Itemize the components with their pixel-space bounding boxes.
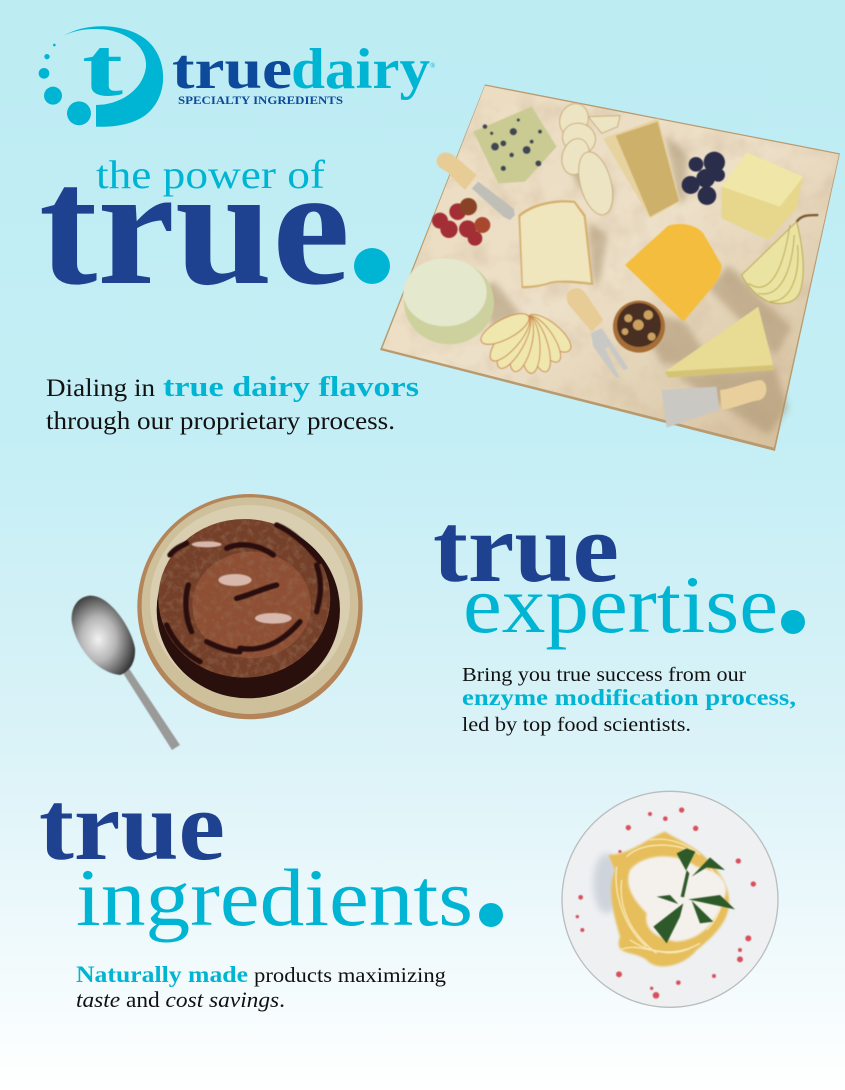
spoon [72,596,180,750]
round bloomy cheese [403,258,494,344]
line three: led by top food scientists. [462,714,691,736]
large pale wedge [518,200,593,288]
bread slices [555,100,620,219]
line one highlight: Naturally made [76,962,248,987]
line one lead: Dialing in [46,375,156,402]
logo: True Dairy [39,21,436,127]
photo: pasta plate [561,791,779,1008]
heading word: true: true [39,772,225,881]
red grapes [432,198,490,246]
plate [561,791,779,1008]
text block: dialing in true dairy flavors [46,371,419,435]
photo: chocolate ice cream bowl and spoon [72,494,363,750]
logo registered mark: ® [430,62,436,70]
heading period dot [781,610,805,634]
line one: Bring you true success from our [462,664,746,686]
marble board [380,84,840,451]
heading word: ingredients: ingredients [76,852,473,943]
pasta nest [608,832,729,966]
dark grapes [682,152,725,205]
triangular cheese wedge [665,307,774,378]
line one remainder: products maximizing [254,963,447,987]
spreader knife [437,153,515,220]
line two: taste and cost savings . [76,987,285,1012]
photo: cheese board [380,84,840,451]
blue cheese [473,107,557,183]
apple slices [477,308,576,375]
logo icon: crescent and bubbles [39,26,163,127]
pear slices [742,215,818,303]
logo tagline: SPECIALTY INGREDIENTS [178,93,343,107]
line two highlight: enzyme modification process, [462,685,796,710]
text block: ingredients description [76,962,447,1012]
logo wordmark dairy: dairy [291,38,430,101]
parsley garnish [653,848,735,943]
heading word: true: true [433,494,619,603]
line two: through our proprietary process. [46,408,395,435]
heading word: true: true [39,132,350,320]
line one highlight: true dairy flavors [163,371,419,403]
orange cheese wedge [625,224,722,322]
heading word: expertise: expertise [463,559,778,650]
chocolate sauce [157,522,340,698]
text block: expertise description [462,664,796,736]
hard cheese wedge [603,118,680,218]
heading line: the power of: the power of [96,152,326,197]
ice cream scoop [158,519,330,678]
heading period dot [479,903,503,927]
logo icon letter: t [82,21,123,114]
heading: true ingredients [39,772,503,943]
cheese cube [722,152,803,240]
heading: the power of true [39,132,390,320]
heading: true expertise [433,494,805,650]
cheese items [403,100,818,428]
logo wordmark true: true [172,38,292,101]
red garnish speckles [576,807,756,999]
nut bowl [613,301,665,353]
bowl [137,494,363,719]
cheese knife [662,380,766,428]
cheese fork [567,288,628,378]
heading period dot [354,248,390,284]
cream sauce [628,856,726,942]
